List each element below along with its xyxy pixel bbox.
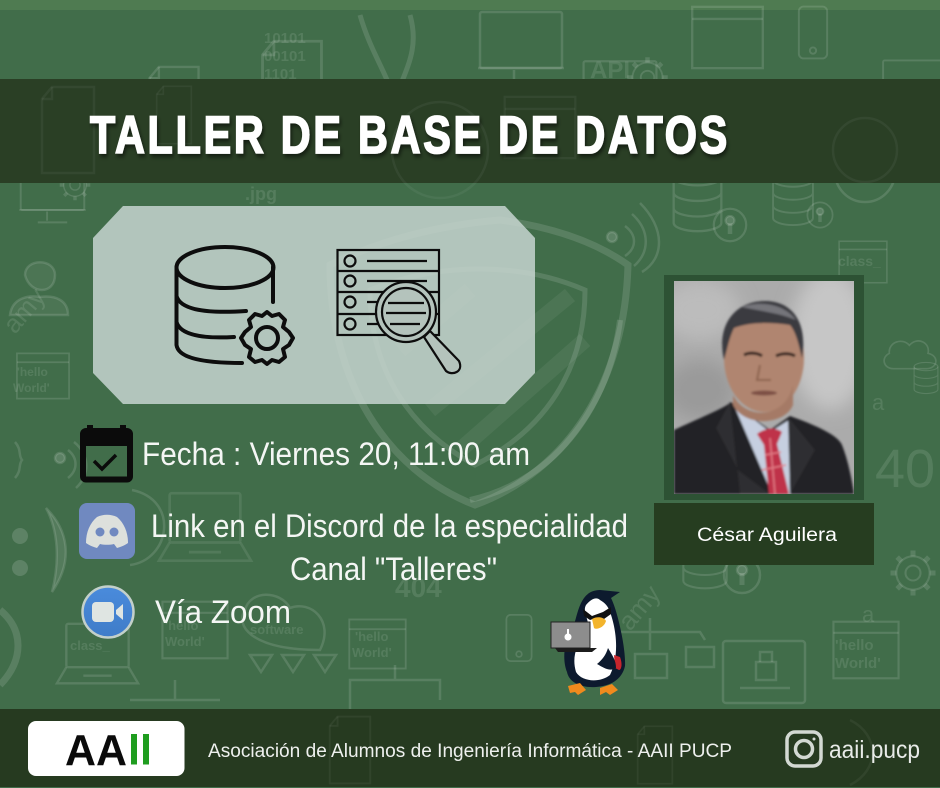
background doodle pattern: 00101 — [264, 48, 306, 65]
background doodle pattern: 404 — [395, 572, 442, 603]
icon: calendar — [81, 425, 132, 480]
background doodle pattern: 40 — [875, 439, 935, 499]
title band — [0, 79, 940, 198]
logo — [28, 721, 184, 776]
background doodle pattern: 'hello — [835, 637, 874, 654]
title: TALLER DE BASE DE DATOS — [90, 106, 727, 165]
icon: instagram — [787, 732, 821, 766]
discord text — [151, 508, 628, 587]
background doodle pattern: World' — [165, 634, 205, 649]
background doodle pattern: 'hello — [355, 629, 388, 644]
background doodle pattern: a — [872, 390, 885, 415]
icon: database with gear — [176, 247, 293, 364]
background doodle pattern: class_ — [70, 638, 111, 653]
icon: zoom — [82, 586, 134, 638]
discord text: Link en el Discord de la especialidad — [151, 508, 628, 544]
footer band — [0, 709, 940, 787]
top light stripe — [0, 0, 940, 10]
date text: Fecha : Viernes 20, 11:00 am — [142, 436, 530, 472]
background doodle pattern: 1101 — [264, 66, 297, 83]
speaker name: César Aguilera — [697, 525, 837, 546]
background doodle pattern: 'hello — [165, 618, 198, 633]
background doodle pattern: a — [862, 602, 875, 627]
zoom text: Vía Zoom — [155, 594, 291, 630]
portrait frame — [660, 270, 870, 500]
background doodle pattern: World' — [835, 655, 881, 672]
background doodle pattern: amy — [612, 579, 666, 636]
icon: discord — [79, 503, 135, 559]
background doodle pattern: API — [590, 57, 630, 84]
panel: database icons — [93, 206, 535, 404]
icon: penguin mascot — [551, 590, 625, 695]
association name: Asociación de Alumnos de Ingeniería Informática - AAII PUCP — [208, 741, 732, 762]
background doodle pattern: software — [250, 622, 303, 637]
background doodle pattern: 'hello — [17, 365, 48, 379]
logo: AA — [65, 726, 127, 775]
portrait photo — [674, 281, 854, 494]
background doodle pattern: class_ — [838, 253, 881, 269]
background doodle pattern: .jpg — [245, 184, 277, 204]
background doodle pattern: World' — [352, 645, 392, 660]
discord text: Canal "Talleres" — [290, 551, 497, 587]
background doodle pattern: 10101 — [264, 30, 306, 47]
background doodle pattern: World' — [13, 381, 50, 395]
instagram handle: aaii.pucp — [829, 736, 920, 764]
icon: server with magnifier — [337, 250, 460, 373]
name box — [654, 503, 874, 565]
